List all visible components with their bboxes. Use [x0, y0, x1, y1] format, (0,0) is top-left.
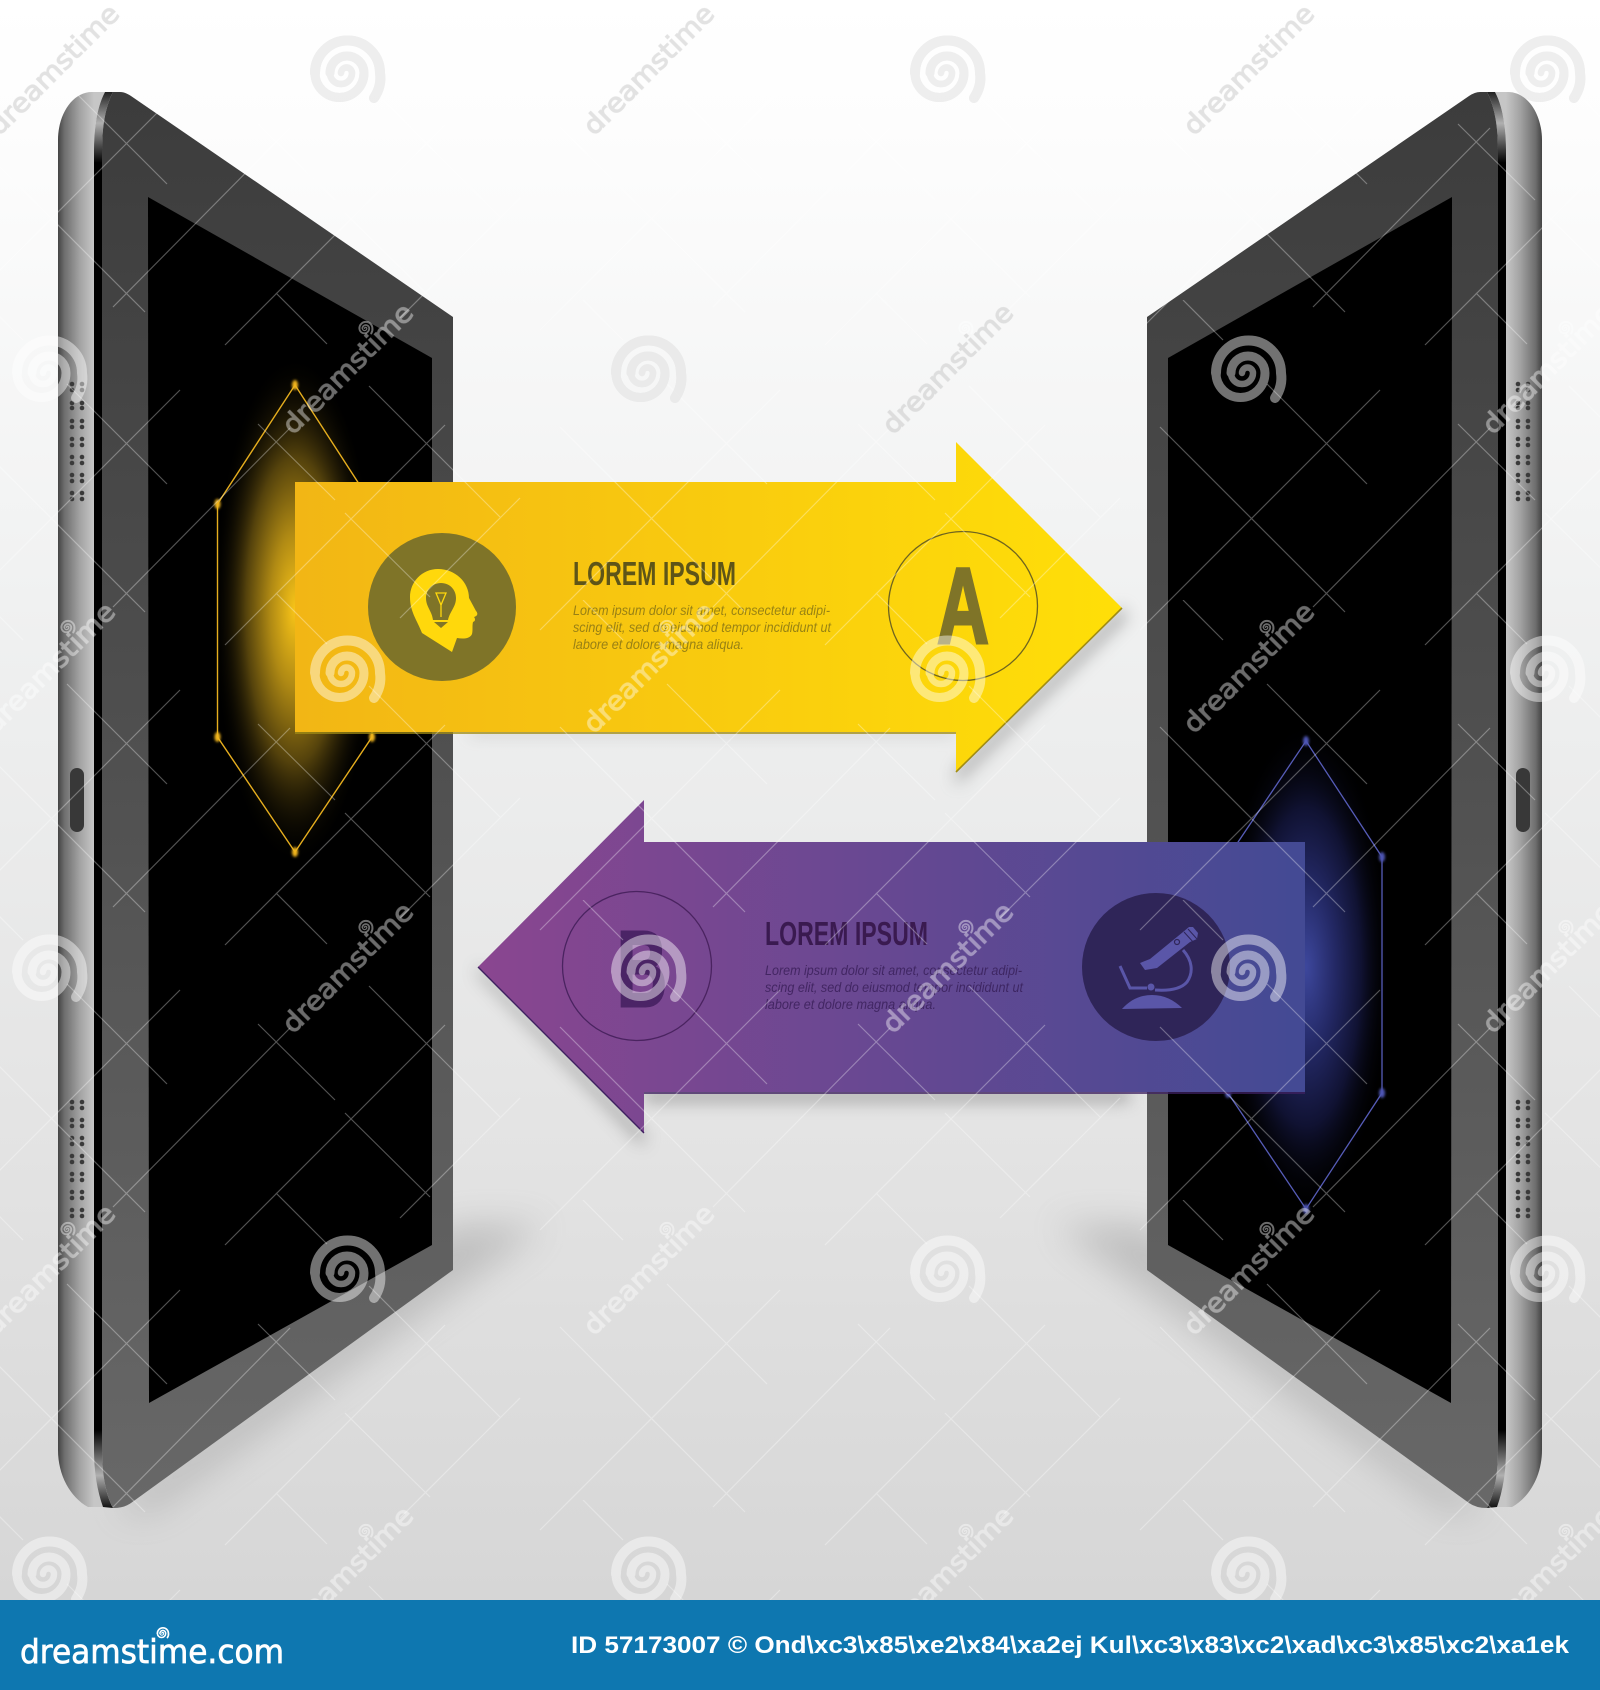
yellow arrow body — [295, 442, 1122, 772]
watermark: dreamstime words: dreamstime — [876, 896, 1020, 1040]
text block: purple body copy: scing elit, sed do eiusmod tempor incididunt ut — [765, 979, 1024, 995]
badge: letter A: A — [937, 545, 989, 666]
watermark: dreamstime words: dreamstime — [276, 1500, 420, 1644]
watermark: words on light background: dreamstime — [577, 0, 721, 142]
right screen glow and hexagon — [1221, 722, 1391, 1214]
heading: purple lorem ipsum: LOREM IPSUM — [765, 915, 928, 952]
badge: letter A — [888, 532, 1038, 680]
footer logo: dreamstime.com — [20, 1632, 284, 1671]
left screen glow and hexagon — [213, 355, 377, 865]
watermark: words on light background: dreamstime — [876, 297, 1020, 441]
watermark: dreamstime words — [0, 297, 1600, 1644]
watermark: dreamstime words: dreamstime — [876, 1500, 1020, 1644]
left tablet — [58, 92, 545, 1512]
watermark: dreamstime words: dreamstime — [1177, 1198, 1321, 1342]
text block: yellow body copy: scing elit, sed do eiusmod tempor incididunt ut — [573, 619, 832, 635]
text block: purple body copy: labore et dolore magna aliqua. — [765, 996, 936, 1012]
text block: yellow body copy: labore et dolore magna aliqua. — [573, 636, 744, 652]
icon: head with lightbulb — [368, 533, 516, 681]
watermark: dreamstime words: dreamstime — [1177, 596, 1321, 740]
panel: purple arrow B — [478, 800, 1305, 1147]
watermark: spiral tint on light background — [315, 40, 1580, 398]
text block: yellow body copy: Lorem ipsum dolor sit amet, consectetur adipi- — [573, 602, 830, 618]
purple arrow body — [478, 800, 1305, 1133]
text block: purple body copy: Lorem ipsum dolor sit amet, consectetur adipi- — [765, 962, 1022, 978]
purple arrow shadow — [478, 965, 1130, 1147]
watermark: dreamstime words: dreamstime — [577, 596, 721, 740]
footer credit: ID 57173007 © Ond\xc3\x85\xe2\x84\xa2ej Kul\xc3\x83\xc2\xad\xc3\x85\xc2\xa1ek — [571, 1632, 1570, 1659]
watermark: small word spirals — [61, 322, 1572, 1536]
yellow arrow shadow — [470, 606, 1128, 786]
text block: yellow body copy — [573, 602, 832, 652]
text block: purple body copy — [765, 962, 1024, 1012]
watermark: words on light background: dreamstime — [1177, 0, 1321, 142]
heading: yellow lorem ipsum: LOREM IPSUM — [573, 555, 736, 592]
watermark: dreamstime words: dreamstime — [276, 297, 420, 441]
watermark: dreamstime words: dreamstime — [276, 896, 420, 1040]
watermark: dreamstime words: dreamstime — [577, 1198, 721, 1342]
badge: letter B — [562, 892, 712, 1040]
watermark: words on light background — [0, 0, 1321, 441]
badge: letter B: B — [617, 908, 667, 1029]
footer bar — [0, 1600, 1600, 1690]
icon: microscope — [1082, 893, 1230, 1041]
panel: yellow arrow A — [295, 442, 1128, 786]
right tablet — [1055, 92, 1542, 1512]
